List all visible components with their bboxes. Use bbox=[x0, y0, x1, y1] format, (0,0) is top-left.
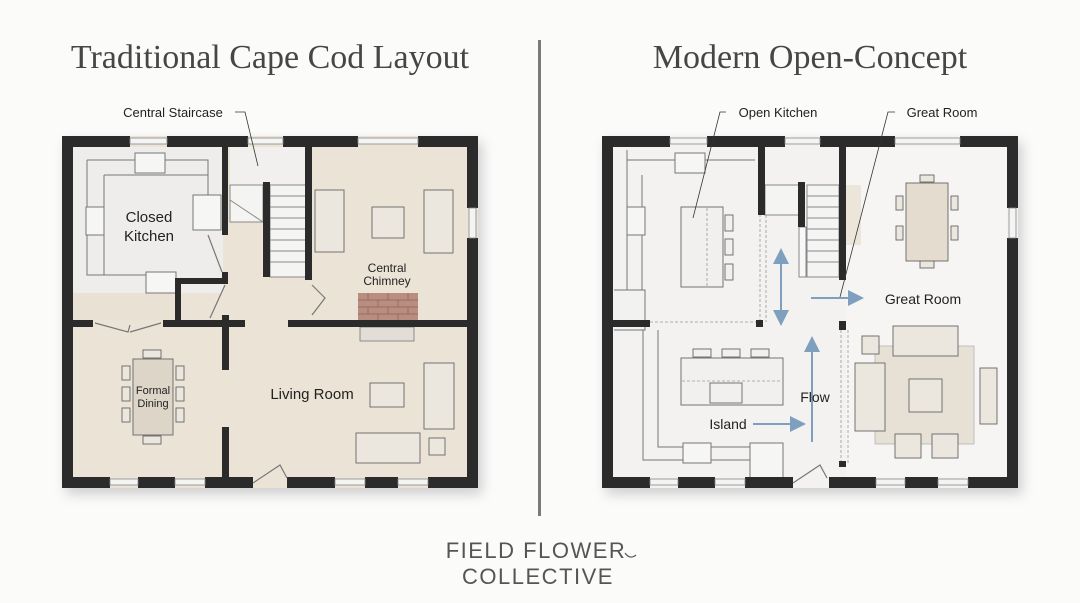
callout: great room bbox=[840, 105, 977, 297]
panel: open concept plan bbox=[602, 136, 1018, 488]
labels: open concept bbox=[709, 291, 961, 432]
callout: open kitchen bbox=[693, 105, 817, 218]
labels: traditional: Kitchen bbox=[124, 228, 174, 245]
panel: traditional plan bbox=[62, 136, 478, 488]
labels: traditional bbox=[124, 209, 411, 410]
callout: great room: Great Room bbox=[907, 105, 977, 120]
labels: traditional: Formal bbox=[136, 385, 170, 397]
logo: COLLECTIVE bbox=[462, 564, 614, 589]
divider bbox=[538, 40, 541, 516]
flow arrows bbox=[753, 252, 860, 442]
logo bbox=[446, 538, 636, 589]
labels: traditional: Closed bbox=[126, 209, 172, 226]
labels: traditional: Living Room bbox=[270, 386, 354, 403]
title: right: Modern Open-Concept bbox=[653, 39, 968, 76]
title: left: Traditional Cape Cod Layout bbox=[71, 39, 470, 76]
labels: open concept: Great Room bbox=[885, 291, 961, 307]
labels: traditional: Chimney bbox=[363, 274, 411, 288]
callout: central staircase: Central Staircase bbox=[123, 105, 223, 120]
labels: open concept: Island bbox=[709, 416, 747, 432]
callout: central staircase bbox=[123, 105, 258, 166]
logo: FIELD FLOWER bbox=[446, 538, 626, 563]
labels: traditional: Central bbox=[368, 261, 406, 275]
callout: open kitchen: Open Kitchen bbox=[739, 105, 817, 120]
labels: open concept: Flow bbox=[800, 389, 831, 405]
labels: traditional: Dining bbox=[137, 398, 169, 410]
